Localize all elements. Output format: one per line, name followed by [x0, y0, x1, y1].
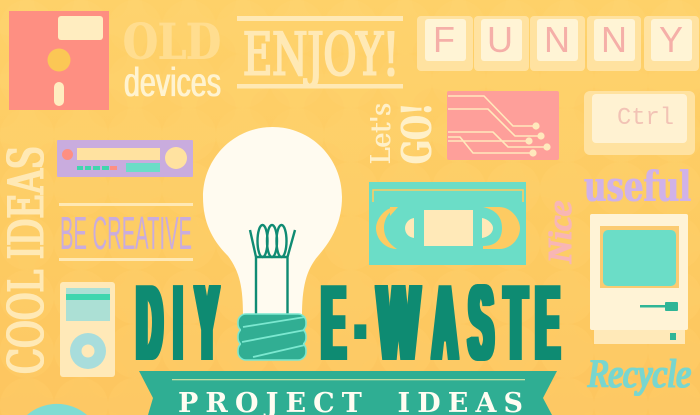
text: Y: [196, 264, 218, 382]
text: BE CREATIVE with rules: [59, 203, 193, 261]
text: ENJOY! with rules: [237, 16, 403, 90]
text: BE CREATIVE: [60, 207, 192, 259]
text: ENJOY! with rules: ENJOY!: [243, 20, 399, 90]
icon: floppy disk: [9, 11, 109, 110]
key: F: [417, 16, 473, 71]
title: E-WASTE: E: [322, 264, 345, 382]
text: devices: devices: [124, 59, 221, 105]
title: E-WASTE: A: [433, 264, 457, 382]
icon: light bulb: [203, 127, 342, 360]
icon: vintage computer: [590, 214, 688, 344]
key: F: F: [433, 19, 455, 60]
title: E-WASTE: [322, 264, 559, 382]
title: E-WASTE: W: [378, 264, 419, 382]
key: U: [474, 16, 529, 71]
key: Ctrl: Ctrl: [617, 105, 674, 132]
text: E: [536, 264, 559, 382]
ribbon banner: [139, 371, 557, 415]
text: OLD: OLD: [123, 12, 221, 71]
keyboard keys: FUNNY: [417, 16, 699, 71]
title: E-WASTE: -: [357, 264, 364, 382]
text: Let's: Let's: [366, 103, 397, 164]
key: N: N: [601, 19, 627, 60]
text: Nice: Nice: [542, 201, 579, 264]
key: U: U: [487, 19, 513, 60]
filament: [250, 225, 295, 314]
text: GO!: GO!: [393, 103, 441, 164]
title: DIY: I: [175, 264, 181, 382]
title: E-WASTE: T: [505, 264, 526, 382]
key: Ctrl: [584, 91, 695, 155]
title: E-WASTE: S: [469, 264, 493, 382]
icon: VHS tape: [369, 182, 526, 265]
icon: cassette radio: [57, 140, 193, 177]
key: N: N: [544, 19, 570, 60]
key: N: [530, 16, 585, 71]
icon: circuit board: [447, 91, 559, 160]
key: Y: [644, 16, 699, 71]
title: DIY: D: [137, 264, 162, 382]
decorative teal circle: [27, 404, 87, 415]
bulb screw base: [238, 314, 306, 360]
key: Y: Y: [659, 19, 683, 60]
icon: mp3 player: [60, 282, 115, 377]
key: N: [587, 16, 641, 71]
